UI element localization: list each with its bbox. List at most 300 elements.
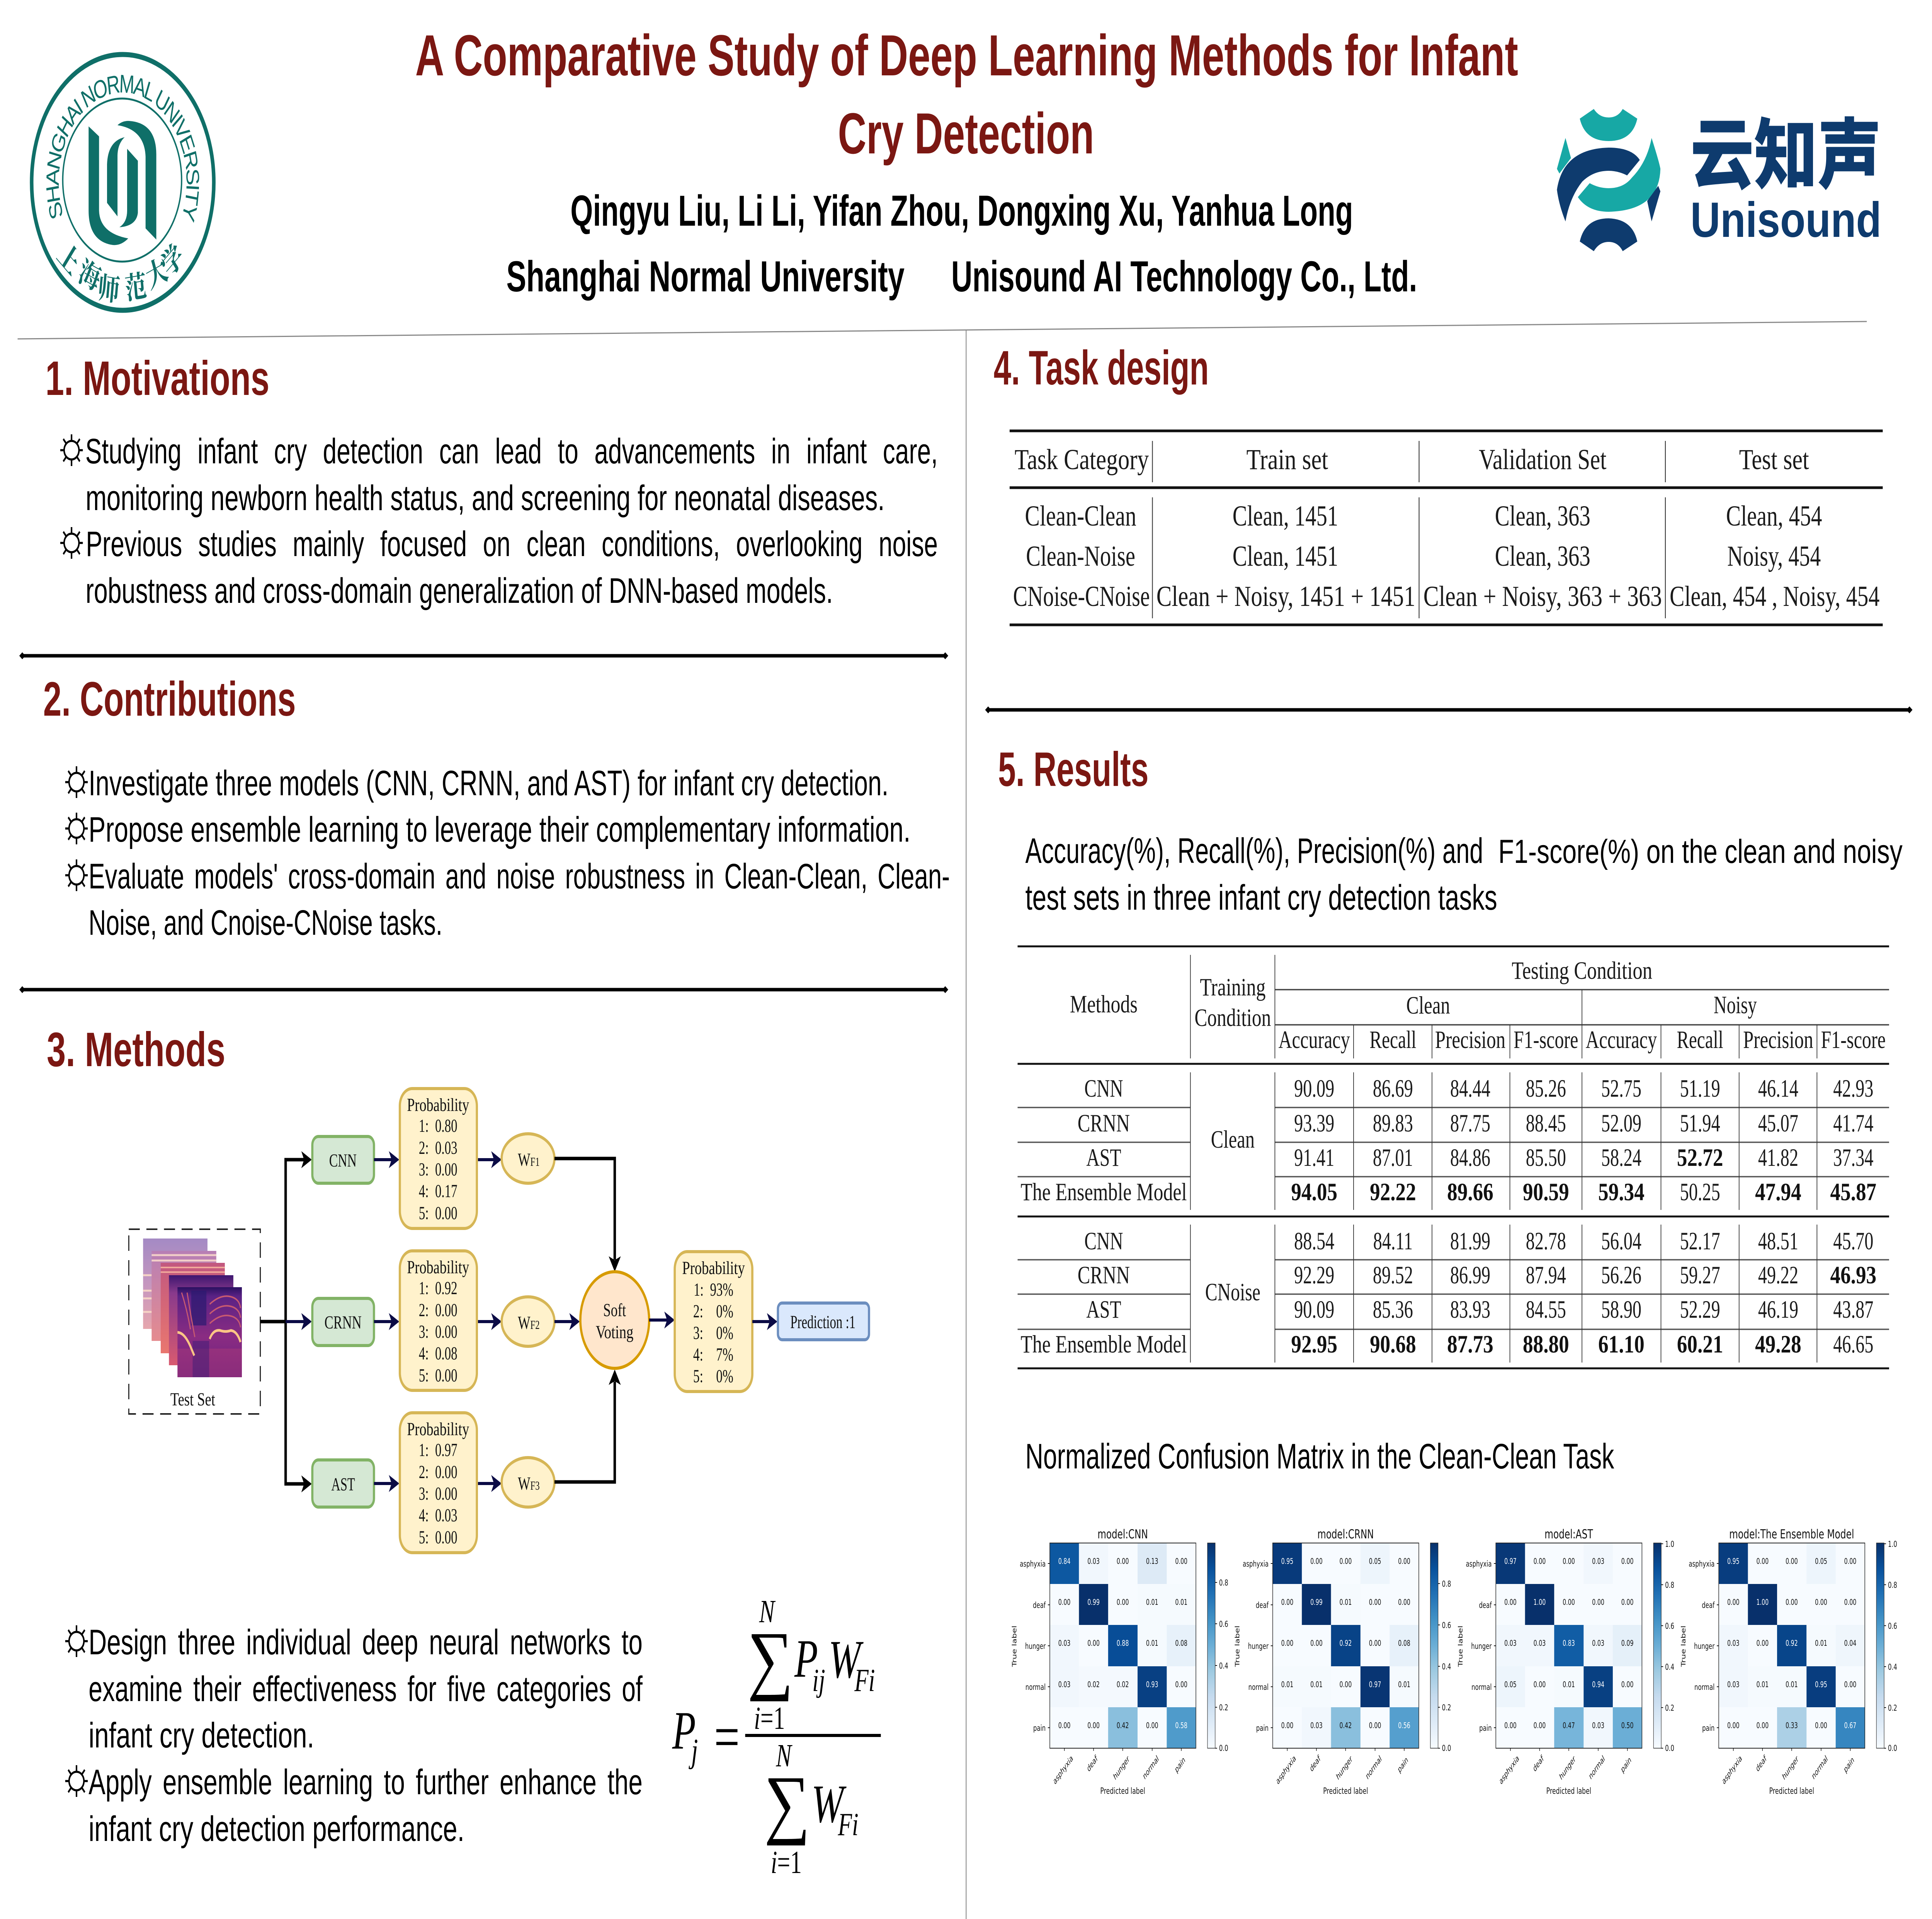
chart: confusion matrix CRNN: model:CRNN (1317, 1527, 1374, 1541)
chart: confusion matrix CRNN: 0.00 (1340, 1557, 1352, 1566)
chart: confusion matrix CRNN: 0.00 (1340, 1681, 1352, 1689)
chart: confusion matrix AST: hunger (1558, 1754, 1578, 1782)
table: results: Precision (1743, 1026, 1813, 1054)
probability box: AST: 3: 0.00 (419, 1484, 457, 1504)
chart: confusion matrix AST: 0.03 (1534, 1639, 1546, 1648)
table: results: 90.09 (1294, 1075, 1334, 1102)
chart: confusion matrix CNN: 0.00 (1058, 1598, 1070, 1607)
chart: confusion matrix ensemble: deaf (1754, 1753, 1769, 1774)
prediction box: Prediction :1 (790, 1312, 855, 1333)
table: results: 81.99 (1450, 1228, 1490, 1255)
table: results: 85.50 (1526, 1144, 1566, 1172)
chart: confusion matrix CNN (1011, 1527, 1228, 1796)
chart: confusion matrix ensemble: 0.00 (1815, 1722, 1827, 1730)
probability box: ensemble: 3: 0% (693, 1323, 733, 1344)
chart: confusion matrix ensemble: 0.95 (1727, 1557, 1740, 1566)
chart: confusion matrix CNN: 0.8 (1219, 1579, 1228, 1588)
chart: confusion matrix AST: deaf (1531, 1753, 1546, 1774)
prediction box (778, 1303, 869, 1340)
chart: confusion matrix CNN: 0.01 (1175, 1598, 1187, 1607)
table: results: 46.14 (1758, 1075, 1798, 1102)
chart: confusion matrix AST: 0.00 (1504, 1722, 1517, 1730)
chart: confusion matrix ensemble: 1.0 (1888, 1540, 1897, 1549)
table: task design: Clean + Noisy, 1451 + 1451 (1156, 580, 1415, 612)
chart: confusion matrix AST: 0.00 (1592, 1598, 1604, 1607)
panel: motivations (46, 351, 938, 611)
probability box: ensemble: 4: 7% (693, 1345, 733, 1365)
chart: confusion matrix CRNN: 0.6 (1442, 1621, 1451, 1630)
probability box: AST: Probability (407, 1419, 469, 1440)
chart: confusion matrix CNN: normal (1026, 1683, 1046, 1692)
table: results: CNN (1084, 1075, 1123, 1102)
chart: confusion matrix CNN: pain (1033, 1724, 1046, 1733)
table: results: F1-score (1514, 1026, 1578, 1054)
table: results: 46.93 (1830, 1262, 1876, 1289)
weight ellipses: WF2 (518, 1313, 540, 1334)
table: results: 87.75 (1450, 1110, 1490, 1137)
probability box: CNN: 2: 0.03 (419, 1138, 457, 1159)
chart: confusion matrix CNN: 0.00 (1087, 1722, 1100, 1730)
table: task design: Clean-Clean (1025, 500, 1136, 532)
chart: confusion matrix AST: 1.00 (1534, 1598, 1546, 1607)
formula: weighted soft voting: ∑ (747, 1616, 793, 1701)
table: results: Accuracy (1586, 1026, 1657, 1054)
table: task design: CNoise-CNoise (1013, 580, 1150, 612)
panel: results (998, 742, 1903, 1796)
chart: confusion matrix CRNN: 0.00 (1369, 1639, 1381, 1648)
soft voting circle: Soft (603, 1300, 626, 1321)
probability box: ensemble (675, 1252, 752, 1392)
chart: confusion matrix CNN: 0.6 (1219, 1620, 1228, 1629)
chart: confusion matrix CRNN: True label (1234, 1626, 1241, 1667)
test set spectrograms: Test Set (170, 1390, 215, 1410)
table: results: 89.66 (1447, 1179, 1493, 1206)
probability box: CRNN: 1: 0.92 (419, 1278, 457, 1299)
text block: motivations (85, 431, 938, 611)
probability box: CRNN: 2: 0.00 (419, 1300, 457, 1321)
table: results: 84.44 (1450, 1075, 1490, 1102)
caption: confusion matrices: Normalized Confusion Matrix in the Clean-Clean Task (1025, 1436, 1614, 1476)
panel: task design (994, 341, 1883, 625)
table: results: 45.07 (1758, 1110, 1798, 1137)
chart: confusion matrix ensemble: 0.33 (1786, 1722, 1798, 1730)
chart: confusion matrix CRNN: normal (1364, 1754, 1383, 1781)
model boxes: CNN (329, 1151, 357, 1171)
chart: confusion matrix CRNN: 0.01 (1310, 1681, 1323, 1689)
formula: weighted soft voting (672, 1593, 881, 1880)
table: task design: Clean, 363 (1495, 540, 1590, 572)
weight ellipses (502, 1134, 554, 1507)
chart: confusion matrix CRNN: 0.01 (1281, 1681, 1293, 1689)
logo: Shanghai Normal University: 上 (52, 231, 88, 283)
text block: methods: Design three individual deep neural networks to (88, 1622, 643, 1662)
table: results: 83.93 (1450, 1296, 1490, 1324)
chart: confusion matrix AST: 0.00 (1534, 1557, 1546, 1566)
probability box: AST: 4: 0.03 (419, 1506, 457, 1526)
chart: confusion matrix ensemble: 0.00 (1844, 1681, 1856, 1689)
table: results: 59.27 (1680, 1262, 1720, 1289)
chart: confusion matrix CNN: 0.02 (1087, 1681, 1100, 1689)
table: results: 41.74 (1833, 1110, 1873, 1137)
probability box: CNN: 5: 0.00 (419, 1203, 457, 1224)
table: results: Condition (1194, 1004, 1271, 1032)
table: results: 42.93 (1833, 1075, 1873, 1102)
chart: confusion matrix CNN: 0.00 (1146, 1722, 1158, 1730)
bullet icons: contributions (65, 766, 88, 891)
table: results: 51.94 (1680, 1110, 1720, 1137)
chart: confusion matrix ensemble: 0.00 (1727, 1598, 1740, 1607)
table: results: 59.34 (1598, 1179, 1645, 1206)
chart: confusion matrix CRNN: 0.05 (1369, 1557, 1381, 1566)
table: task design: Noisy, 454 (1727, 540, 1821, 572)
table: results: Training (1200, 974, 1266, 1001)
table: results: 56.26 (1601, 1262, 1641, 1289)
chart: confusion matrix AST: asphyxia (1466, 1560, 1492, 1569)
chart: confusion matrix ensemble: pain (1702, 1724, 1714, 1733)
text block: methods: examine their effectiveness for five categories of (88, 1669, 643, 1709)
chart: confusion matrix CNN: 0.13 (1146, 1557, 1158, 1566)
table: results: 43.87 (1833, 1296, 1873, 1324)
probability box: ensemble: 2: 0% (693, 1301, 733, 1322)
table: results: 89.83 (1373, 1110, 1413, 1137)
text block: motivations: Previous studies mainly focused on clean conditions, overlooking noise (86, 524, 938, 564)
table: results: 37.34 (1833, 1144, 1873, 1172)
chart: confusion matrix AST: 0.03 (1592, 1722, 1604, 1730)
flow diagram: ensemble pipeline (129, 1089, 869, 1553)
formula: weighted soft voting: Fi (854, 1662, 875, 1698)
table: results: 91.41 (1294, 1144, 1334, 1172)
chart: confusion matrix CNN: 0.00 (1175, 1557, 1187, 1566)
probability box: CNN: 4: 0.17 (419, 1181, 457, 1202)
chart: confusion matrix ensemble: 0.00 (1756, 1557, 1769, 1566)
bullet icons: methods (65, 1625, 88, 1797)
formula: weighted soft voting: i=1 (771, 1844, 802, 1880)
chart: confusion matrix CNN: 0.93 (1146, 1681, 1158, 1689)
table: results: The Ensemble Model (1020, 1331, 1187, 1358)
chart: confusion matrix ensemble: Predicted label (1769, 1786, 1814, 1796)
chart: confusion matrix CNN: Predicted label (1100, 1786, 1145, 1796)
chart: confusion matrix ensemble: normal (1694, 1683, 1714, 1692)
text block: motivations: monitoring newborn health status, and screening for neonatal diseases. (85, 478, 885, 518)
table: task design: Task Category (1015, 444, 1149, 476)
chart: confusion matrix CNN: hunger (1025, 1642, 1046, 1651)
chart: confusion matrix AST: 0.00 (1534, 1681, 1546, 1689)
chart: confusion matrix CNN: 0.2 (1219, 1703, 1228, 1713)
chart: confusion matrix CRNN (1234, 1527, 1451, 1796)
chart: confusion matrix AST: 0.50 (1621, 1722, 1634, 1730)
table: results: 87.73 (1447, 1331, 1493, 1358)
text block: results intro: F1-score(%) on the clean and noisy (1498, 833, 1903, 870)
chart: confusion matrix AST: True label (1457, 1626, 1464, 1667)
logo: Shanghai Normal University (32, 54, 214, 310)
table: results: 84.11 (1373, 1228, 1413, 1255)
test set spectrograms (129, 1229, 260, 1414)
table: results: Accuracy (1279, 1026, 1350, 1054)
table: results: CNoise (1205, 1279, 1260, 1306)
table: results: 60.21 (1677, 1331, 1723, 1358)
chart: confusion matrix CNN: asphyxia (1020, 1560, 1046, 1569)
table: results (1018, 946, 1889, 1368)
table: results: 52.75 (1601, 1075, 1641, 1102)
table: results: 46.65 (1833, 1331, 1873, 1358)
table: results: 48.51 (1758, 1228, 1798, 1255)
chart: confusion matrix CNN: asphyxia (1052, 1754, 1075, 1786)
chart: confusion matrix AST: 0.05 (1504, 1681, 1517, 1689)
chart: confusion matrix CRNN: 0.00 (1281, 1598, 1293, 1607)
formula: weighted soft voting: i=1 (754, 1700, 785, 1736)
table: results: 61.10 (1598, 1331, 1645, 1358)
chart: confusion matrix AST: Predicted label (1546, 1786, 1591, 1796)
chart: confusion matrix ensemble: 0.00 (1844, 1598, 1856, 1607)
heading: methods: 3. Methods (47, 1022, 225, 1076)
formula: weighted soft voting: ∑ (764, 1760, 810, 1846)
chart: confusion matrix CNN: 0.00 (1087, 1639, 1100, 1648)
text block: motivations: Studying infant cry detection can lead to advancements in infant care, (85, 431, 938, 471)
table: results: Testing Condition (1512, 957, 1652, 985)
chart: confusion matrix ensemble: 0.0 (1888, 1744, 1897, 1753)
table: results: Recall (1677, 1026, 1723, 1054)
arrow: soft voting to probability (649, 1312, 675, 1329)
table: results: AST (1086, 1296, 1121, 1324)
table: results: CRNN (1078, 1262, 1130, 1289)
chart: confusion matrix AST: 0.94 (1592, 1681, 1604, 1689)
chart: confusion matrix ensemble: asphyxia (1721, 1754, 1743, 1786)
table: results: AST (1086, 1144, 1121, 1172)
table: results: F1-score (1821, 1026, 1886, 1054)
chart: confusion matrix CNN: 0.01 (1146, 1598, 1158, 1607)
chart: confusion matrix CNN: 0.02 (1117, 1681, 1129, 1689)
chart: confusion matrix ensemble: 0.4 (1888, 1663, 1897, 1672)
formula: weighted soft voting: W (828, 1630, 864, 1689)
chart: confusion matrix CRNN: 0.00 (1310, 1557, 1323, 1566)
arrows: test set to models (260, 1151, 312, 1492)
chart: confusion matrix CRNN: 0.95 (1281, 1557, 1293, 1566)
logo: Shanghai Normal University: 海 (75, 248, 106, 299)
chart: confusion matrix ensemble: asphyxia (1689, 1560, 1714, 1569)
chart: confusion matrix CNN: 0.4 (1219, 1662, 1228, 1671)
chart: confusion matrix AST: 0.6 (1665, 1622, 1674, 1631)
table: results: 52.17 (1680, 1228, 1720, 1255)
probability box: CNN: Probability (407, 1095, 469, 1116)
chart: confusion matrix AST: 0.00 (1504, 1598, 1517, 1607)
text block: methods: infant cry detection. (88, 1715, 314, 1755)
chart: confusion matrix CNN: 0.00 (1058, 1722, 1070, 1730)
chart: confusion matrix AST: 0.09 (1621, 1639, 1634, 1648)
table: results: 85.36 (1373, 1296, 1413, 1324)
formula: weighted soft voting: = (714, 1701, 740, 1772)
chart: confusion matrix ensemble: 0.00 (1786, 1598, 1798, 1607)
table: results: CRNN (1078, 1110, 1130, 1137)
model boxes: AST (331, 1475, 355, 1495)
chart: confusion matrix ensemble: 0.00 (1727, 1722, 1740, 1730)
heading: contributions: 2. Contributions (43, 672, 296, 726)
affiliations (506, 252, 1417, 301)
table: results: Precision (1435, 1026, 1505, 1054)
chart: confusion matrix CRNN: 0.00 (1398, 1557, 1410, 1566)
table: results: 89.52 (1373, 1262, 1413, 1289)
table: task design: Validation Set (1479, 444, 1607, 476)
arrows: weights to soft voting (554, 1159, 621, 1482)
table: results: 52.29 (1680, 1296, 1720, 1324)
table: results: 92.29 (1294, 1262, 1334, 1289)
table: results: 41.82 (1758, 1144, 1798, 1172)
table: task design: Clean, 1451 (1233, 500, 1338, 532)
chart: confusion matrix ensemble: normal (1810, 1754, 1830, 1781)
table: results: 50.25 (1680, 1179, 1720, 1206)
chart: confusion matrix CNN: 0.03 (1058, 1639, 1070, 1648)
model boxes (312, 1136, 374, 1507)
text block: contributions (88, 763, 950, 942)
chart: confusion matrix ensemble: deaf (1702, 1601, 1715, 1610)
chart: confusion matrix CRNN: 0.00 (1281, 1722, 1293, 1730)
probability box: AST: 1: 0.97 (419, 1440, 457, 1461)
chart: confusion matrix ensemble: 0.00 (1786, 1557, 1798, 1566)
chart: confusion matrix ensemble: 0.8 (1888, 1581, 1897, 1590)
table: results: 84.55 (1526, 1296, 1566, 1324)
chart: confusion matrix ensemble: 0.92 (1786, 1639, 1798, 1648)
text block: contributions: Noise, and Cnoise-CNoise tasks. (88, 903, 442, 942)
probability box: AST: 2: 0.00 (419, 1462, 457, 1483)
chart: confusion matrix CRNN: 0.00 (1398, 1598, 1410, 1607)
title: A Comparative Study of Deep Learning Methods for Infant (415, 23, 1518, 88)
chart: confusion matrix CRNN: hunger (1335, 1754, 1354, 1782)
chart: confusion matrix CRNN: 0.0 (1442, 1744, 1451, 1753)
chart: confusion matrix ensemble: pain (1842, 1756, 1856, 1775)
chart: confusion matrix ensemble: hunger (1781, 1754, 1800, 1782)
chart: confusion matrix CRNN: pain (1256, 1724, 1269, 1733)
soft voting circle: Voting (596, 1322, 634, 1343)
chart: confusion matrix CRNN: 0.03 (1310, 1722, 1323, 1730)
chart: confusion matrix CNN: normal (1141, 1754, 1160, 1781)
chart: confusion matrix ensemble: 0.01 (1786, 1681, 1798, 1689)
table: results: 87.94 (1526, 1262, 1566, 1289)
affiliations: Unisound AI Technology Co., Ltd. (951, 252, 1417, 301)
chart: confusion matrix CNN: model:CNN (1097, 1527, 1148, 1541)
chart: confusion matrix CNN: 0.03 (1087, 1557, 1100, 1566)
chart: confusion matrix AST: model:AST (1544, 1527, 1594, 1541)
chart: confusion matrix ensemble: 0.00 (1756, 1639, 1769, 1648)
title (415, 23, 1518, 166)
chart: confusion matrix ensemble: 0.00 (1756, 1722, 1769, 1730)
chart: confusion matrix CRNN: 0.92 (1340, 1639, 1352, 1648)
probability box: AST: 5: 0.00 (419, 1528, 457, 1548)
text block: contributions: Investigate three models (CNN, CRNN, and AST) for infant cry detection. (88, 763, 889, 803)
formula: weighted soft voting: P (794, 1629, 818, 1689)
table: results: 84.86 (1450, 1144, 1490, 1172)
chart: confusion matrix CRNN: hunger (1248, 1642, 1269, 1651)
chart: confusion matrix ensemble: 0.6 (1888, 1622, 1897, 1631)
text block: methods: Apply ensemble learning to further enhance the (88, 1762, 643, 1802)
chart: confusion matrix AST: 0.00 (1621, 1681, 1634, 1689)
table: task design: Clean, 454 , Noisy, 454 (1670, 580, 1879, 612)
chart: confusion matrix AST: 0.00 (1621, 1598, 1634, 1607)
chart: confusion matrix CNN: 0.99 (1087, 1598, 1100, 1607)
formula: weighted soft voting: W (811, 1774, 847, 1834)
logo: Shanghai Normal University: 范 (123, 262, 148, 308)
table: results: 92.95 (1291, 1331, 1337, 1358)
chart: confusion matrix CRNN: 0.97 (1369, 1681, 1381, 1689)
text block: motivations: robustness and cross-domain generalization of DNN-based models. (85, 571, 833, 611)
table: results: 58.90 (1601, 1296, 1641, 1324)
chart: confusion matrix CNN: 0.00 (1175, 1681, 1187, 1689)
chart: confusion matrix CNN: hunger (1112, 1754, 1131, 1782)
affiliations: Shanghai Normal University (506, 252, 905, 301)
chart: confusion matrix CRNN: 0.42 (1340, 1722, 1352, 1730)
text block: results intro: Accuracy(%), Recall(%), Precision(%) and (1025, 831, 1483, 871)
probability box: CNN: 3: 0.00 (419, 1160, 457, 1180)
text block: results intro (1025, 831, 1903, 917)
table: results: 58.24 (1601, 1144, 1641, 1172)
formula: weighted soft voting: Fi (838, 1806, 859, 1842)
table: results: 90.68 (1370, 1331, 1416, 1358)
logo: Shanghai Normal University: 学 (153, 233, 189, 285)
chart: confusion matrix ensemble: 0.03 (1727, 1681, 1740, 1689)
chart: confusion matrix AST: 0.03 (1504, 1639, 1517, 1648)
panel: methods (47, 1022, 881, 1880)
chart: confusion matrix AST: 0.8 (1665, 1581, 1674, 1590)
table: task design: Clean, 363 (1495, 500, 1590, 532)
table: results: 93.39 (1294, 1110, 1334, 1137)
chart: confusion matrix CRNN: 0.08 (1398, 1639, 1410, 1648)
chart: confusion matrix AST: hunger (1471, 1642, 1492, 1651)
probability box: CRNN: Probability (407, 1257, 469, 1278)
probability box: CRNN: 5: 0.00 (419, 1366, 457, 1386)
chart: confusion matrix AST: 0.0 (1665, 1744, 1674, 1753)
chart: confusion matrix AST: 1.0 (1665, 1540, 1674, 1549)
chart: confusion matrix CNN: deaf (1085, 1753, 1100, 1774)
chart: confusion matrix AST: 0.00 (1621, 1557, 1634, 1566)
chart: confusion matrix CRNN: asphyxia (1243, 1560, 1269, 1569)
table: results: Noisy (1714, 992, 1757, 1019)
chart: confusion matrix AST: 0.4 (1665, 1663, 1674, 1672)
chart: confusion matrix CRNN: Predicted label (1323, 1786, 1368, 1796)
table: results: 49.22 (1758, 1262, 1798, 1289)
chart: confusion matrix AST: 0.01 (1563, 1681, 1575, 1689)
chart: confusion matrix CRNN: 0.8 (1442, 1580, 1451, 1589)
table: task design: Clean, 1451 (1233, 540, 1338, 572)
chart: confusion matrix CNN: 0.00 (1117, 1598, 1129, 1607)
table: results: 90.09 (1294, 1296, 1334, 1324)
table: results: 88.80 (1523, 1331, 1569, 1358)
text block: results intro: test sets in three infant cry detection tasks (1025, 878, 1497, 917)
text block: contributions: Propose ensemble learning to leverage their complementary information. (88, 810, 911, 849)
title: Cry Detection (838, 101, 1094, 166)
chart: confusion matrix ensemble: 0.00 (1844, 1557, 1856, 1566)
chart: confusion matrix AST: normal (1587, 1754, 1607, 1781)
table: task design: Clean + Noisy, 363 + 363 (1423, 580, 1662, 612)
text block: methods (88, 1622, 643, 1849)
table: results: 82.78 (1526, 1228, 1566, 1255)
logo: Unisound: Unisound (1690, 192, 1881, 248)
soft voting circle (580, 1272, 649, 1368)
table: task design: Test set (1739, 444, 1809, 476)
weight ellipses: WF1 (518, 1150, 540, 1170)
chart: confusion matrix AST: normal (1471, 1683, 1492, 1692)
chart: confusion matrix CNN: 0.03 (1058, 1681, 1070, 1689)
chart: confusion matrix ensemble: 0.05 (1815, 1557, 1827, 1566)
formula: weighted soft voting: P (672, 1701, 696, 1761)
probability box: CRNN: 3: 0.00 (419, 1322, 457, 1342)
chart: confusion matrix AST: 0.03 (1592, 1557, 1604, 1566)
table: results: 45.87 (1830, 1179, 1876, 1206)
chart: confusion matrix ensemble: 0.00 (1815, 1598, 1827, 1607)
probability box: CRNN (400, 1251, 477, 1390)
table: results: 49.28 (1755, 1331, 1801, 1358)
chart: confusion matrix CNN: 0.0 (1219, 1744, 1228, 1753)
chart: confusion matrix AST: 0.00 (1563, 1598, 1575, 1607)
chart: confusion matrix AST: pain (1479, 1724, 1492, 1733)
text block: methods: infant cry detection performance. (88, 1809, 464, 1849)
